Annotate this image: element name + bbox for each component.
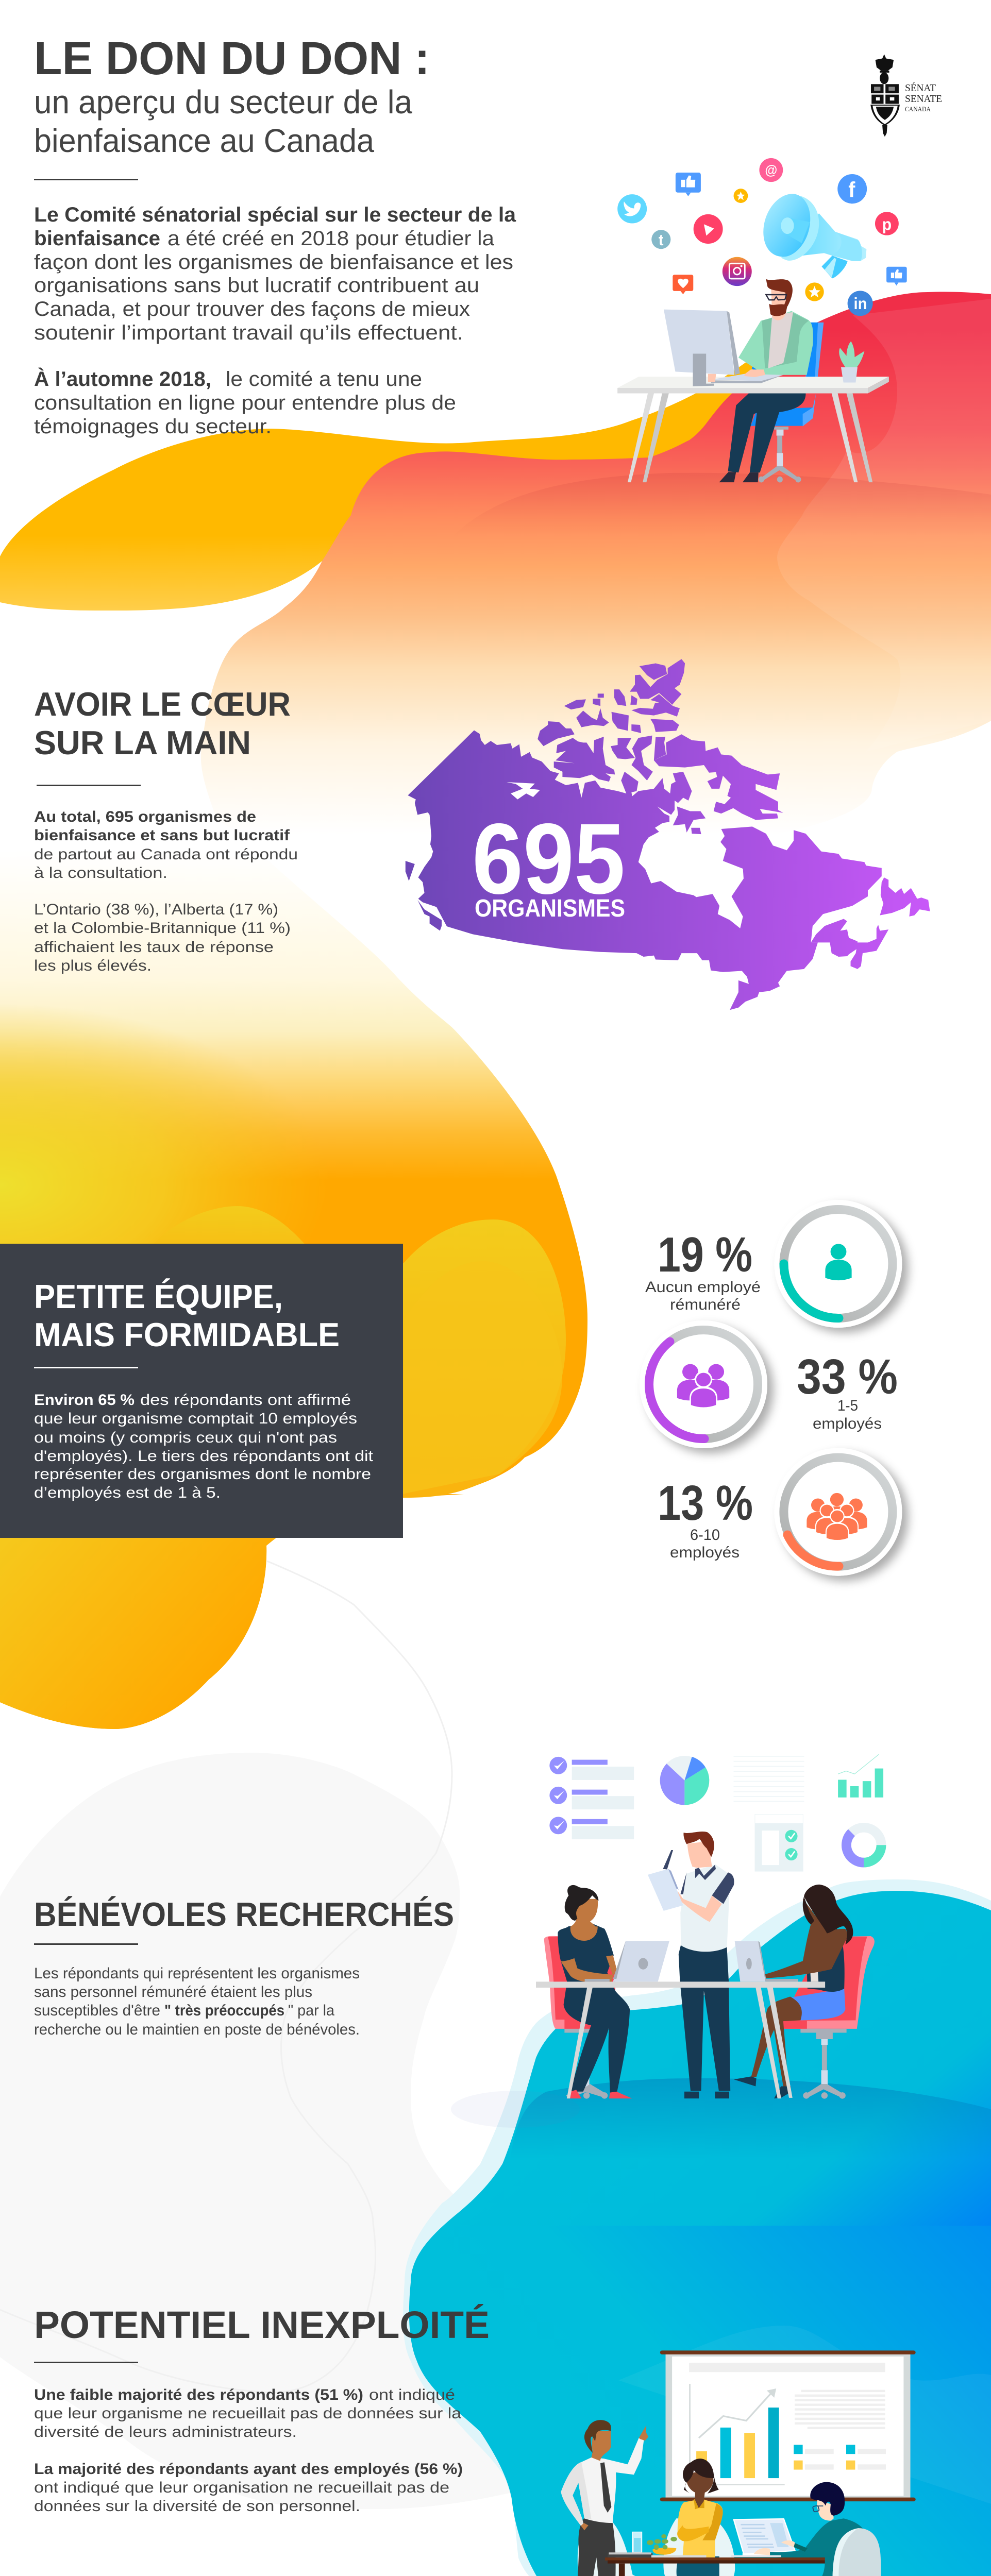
illustration: meeting with presentation board bbox=[561, 2350, 916, 2576]
panel text: d'employés). Le tiers des répondants ont dit bbox=[34, 1448, 374, 1465]
background: dark red ground shadow bbox=[453, 473, 991, 536]
stat value: 19 % bbox=[658, 1227, 752, 1282]
icon: twitter bbox=[617, 194, 647, 224]
section heading: potentiel: POTENTIEL INEXPLOITÉ bbox=[34, 2303, 490, 2346]
icon: facebook bbox=[837, 174, 867, 204]
intro paragraph 1: Le Comité sénatorial spécial sur le secteur de la bbox=[34, 204, 516, 226]
subtitle line 2: bienfaisance au Canada bbox=[34, 122, 374, 159]
panel text bbox=[34, 1392, 374, 1501]
icon: linkedin bbox=[848, 291, 873, 316]
icon: checklist bbox=[549, 1757, 634, 1839]
text block: bénévoles: recherche ou le maintien en poste de bénévoles. bbox=[34, 2021, 360, 2038]
text block: potentiel bbox=[34, 2386, 463, 2515]
logo: Senate of Canada: CANADA bbox=[905, 105, 931, 113]
intro paragraph 2: consultation en ligne pour entendre plus de bbox=[34, 392, 456, 414]
icon: linkedin: in bbox=[854, 295, 867, 313]
text block: bénévoles: susceptibles d'être bbox=[34, 2002, 160, 2019]
panel text: que leur organisme comptait 10 employés bbox=[34, 1410, 357, 1427]
icon: play bbox=[694, 214, 723, 244]
intro paragraph 1: Canada, et pour trouver des façons de mieux bbox=[34, 298, 470, 320]
icon: crest bbox=[871, 54, 899, 137]
stat label bbox=[670, 1527, 740, 1561]
panel text: d’employés est de 1 à 5. bbox=[34, 1484, 221, 1501]
man torso bbox=[738, 311, 813, 376]
panel heading bbox=[34, 1278, 340, 1353]
panel text: représenter des organismes dont le nombre bbox=[34, 1466, 371, 1483]
background: blue blobs bbox=[403, 1879, 991, 2576]
icon: tumblr: t bbox=[659, 231, 664, 249]
section heading: avoir le coeur: AVOIR LE CŒUR bbox=[34, 685, 291, 723]
stat label: rémunéré bbox=[670, 1296, 741, 1313]
icon: instagram bbox=[723, 257, 752, 286]
text block: bénévoles: sans personnel rémunéré étaient les plus bbox=[34, 1984, 312, 2001]
stat value: 13 % bbox=[658, 1476, 753, 1531]
background: grey blob bbox=[0, 1753, 518, 2509]
ring chart bbox=[640, 1320, 767, 1448]
icon: at sign: @ bbox=[765, 163, 777, 178]
text block: potentiel: ont indiqué que leur organisation ne recueillait pas de bbox=[34, 2479, 449, 2496]
text block: bénévoles: " très préoccupés bbox=[164, 2002, 284, 2019]
stat: 33 % bbox=[640, 1320, 898, 1448]
stat value: 33 % bbox=[797, 1349, 898, 1404]
map number: 695 bbox=[472, 803, 625, 915]
panel text: des répondants ont affirmé bbox=[140, 1392, 351, 1409]
intro paragraph 1: bienfaisance bbox=[34, 227, 160, 250]
text block: consultation: les plus élevés. bbox=[34, 957, 152, 974]
glass and plant bbox=[608, 2532, 677, 2557]
text block: consultation: affichaient les taux de réponse bbox=[34, 939, 274, 956]
table bbox=[605, 2555, 825, 2576]
text block: bénévoles bbox=[34, 1965, 360, 2038]
text block: potentiel: données sur la diversité de son personnel. bbox=[34, 2498, 360, 2515]
panel heading: PETITE ÉQUIPE, bbox=[34, 1278, 283, 1315]
icon: like bubble 2 bbox=[886, 267, 907, 285]
red chair left bbox=[544, 1936, 628, 2099]
stat label: 1-5 bbox=[837, 1397, 858, 1414]
background: orange blob section 3 bbox=[0, 835, 587, 1729]
intro paragraph 2: témoignages du secteur. bbox=[34, 415, 272, 438]
text block: consultation: et la Colombie-Britannique (11 %) bbox=[34, 920, 291, 937]
chair back bbox=[804, 323, 824, 394]
donut chart icon bbox=[846, 1827, 881, 1862]
map label: ORGANISMES bbox=[475, 895, 625, 922]
chair seat and base bbox=[751, 394, 816, 483]
background: red to peach blob bbox=[201, 292, 991, 855]
text block: bénévoles: Les répondants qui représentent les organismes bbox=[34, 1965, 360, 1982]
text block: consultation: L’Ontario (38 %), l’Alberta (17 %) bbox=[34, 901, 278, 918]
background: yellow wave bbox=[0, 355, 825, 670]
faded text lines bbox=[733, 1756, 804, 1802]
text block: consultation: à la consultation. bbox=[34, 865, 167, 882]
stat label: employés bbox=[670, 1544, 740, 1561]
presentation board bbox=[660, 2350, 916, 2501]
bar chart icon bbox=[838, 1754, 883, 1798]
chair right bbox=[786, 2528, 887, 2576]
man standing bbox=[648, 1832, 734, 2098]
section heading: avoir le coeur: SUR LA MAIN bbox=[34, 724, 251, 761]
icon: at sign bbox=[759, 158, 783, 182]
monitor and keyboard bbox=[664, 310, 783, 386]
intro paragraph 1 bbox=[34, 204, 516, 344]
illustration: man at desk with social icons bbox=[617, 158, 907, 483]
stat label: employés bbox=[813, 1415, 882, 1432]
man head bbox=[766, 279, 793, 320]
panel: petite équipe bbox=[0, 1244, 403, 1538]
desk legs bbox=[628, 394, 872, 482]
section heading: avoir le coeur bbox=[34, 685, 291, 761]
logo text: SÉNAT bbox=[905, 82, 936, 94]
man legs bbox=[719, 394, 806, 482]
intro paragraph 1: a été créé en 2018 pour étudier la bbox=[167, 227, 495, 250]
text block: consultation bbox=[34, 808, 298, 974]
icon: tumblr bbox=[651, 230, 670, 249]
text block: consultation: bienfaisance et sans but lucratif bbox=[34, 827, 290, 844]
stat: 13 % bbox=[658, 1448, 902, 1576]
red chair right bbox=[783, 1936, 875, 2099]
illustration: volunteers team bbox=[536, 1754, 883, 2099]
map: Canada bbox=[406, 659, 930, 1010]
icon: star 2 bbox=[805, 282, 824, 301]
icon: star bbox=[734, 189, 748, 203]
text block: potentiel: Une faible majorité des répondants (51 %) bbox=[34, 2386, 363, 2403]
woman seated bbox=[664, 2459, 723, 2576]
main title: LE DON DU DON : bbox=[34, 33, 430, 84]
subtitle line 1: un aperçu du secteur de la bbox=[34, 83, 412, 121]
panel text: ou moins (y compris ceux qui n'ont pas bbox=[34, 1429, 337, 1446]
background: lighter right overlay bbox=[777, 299, 991, 752]
intro paragraph 1: façon dont les organismes de bienfaisance et les bbox=[34, 251, 513, 274]
background: thin outline curve bbox=[0, 1561, 452, 2393]
ring chart bbox=[774, 1200, 902, 1328]
text block: consultation: Au total, 695 organismes de bbox=[34, 808, 256, 825]
intro paragraph 1: organisations sans but lucratif contribuent au bbox=[34, 274, 479, 297]
stat label: 6-10 bbox=[690, 1527, 720, 1544]
icon: megaphone bbox=[763, 194, 866, 278]
stat label bbox=[813, 1397, 882, 1432]
intro paragraph 1: soutenir l’important travail qu’ils effectuent. bbox=[34, 321, 463, 344]
title block bbox=[34, 33, 430, 159]
intro paragraph 2: À l’automne 2018, bbox=[34, 367, 211, 391]
plant bbox=[839, 341, 864, 382]
ring chart bbox=[774, 1448, 902, 1576]
panel text: Environ 65 % bbox=[34, 1392, 135, 1409]
text block: potentiel: que leur organisme ne recueillait pas de données sur la bbox=[34, 2405, 461, 2422]
icon: pinterest bbox=[875, 212, 899, 235]
pie chart icon bbox=[660, 1756, 709, 1805]
ground shadow under volunteers bbox=[451, 2078, 991, 2159]
panel heading: MAIS FORMIDABLE bbox=[34, 1316, 340, 1353]
text block: potentiel: diversité de leurs administrateurs. bbox=[34, 2424, 297, 2441]
woman right bbox=[734, 1885, 853, 2098]
icon: pinterest: p bbox=[882, 215, 892, 234]
chairs behind table bbox=[578, 2518, 746, 2576]
section heading: bénévoles: BÉNÉVOLES RECHERCHÉS bbox=[34, 1895, 454, 1933]
intro paragraph 2 bbox=[34, 367, 456, 438]
form card icon bbox=[755, 1814, 803, 1872]
text block: potentiel: ont indiqué bbox=[369, 2386, 455, 2403]
logo: Senate of Canada bbox=[871, 54, 942, 137]
icon: facebook: f bbox=[848, 177, 855, 202]
man standing presenter bbox=[561, 2420, 648, 2576]
table and laptops bbox=[536, 1941, 825, 2098]
logo: Senate of Canada: SENATE bbox=[905, 93, 942, 105]
text block: potentiel: La majorité des répondants ayant des employés (56 %) bbox=[34, 2461, 463, 2478]
icon: heart bubble bbox=[673, 275, 693, 294]
stat label bbox=[645, 1279, 761, 1313]
intro paragraph 2: le comité a tenu une bbox=[226, 368, 422, 391]
person with laptop bbox=[734, 2482, 864, 2576]
text block: consultation: de partout au Canada ont répondu bbox=[34, 846, 298, 863]
desk top bbox=[617, 377, 889, 394]
stat label: Aucun employé bbox=[645, 1279, 761, 1296]
woman left bbox=[558, 1885, 632, 2098]
icon: like bubble bbox=[676, 173, 701, 196]
text block: bénévoles: " par la bbox=[288, 2002, 334, 2019]
stat: 19 % bbox=[645, 1200, 902, 1328]
